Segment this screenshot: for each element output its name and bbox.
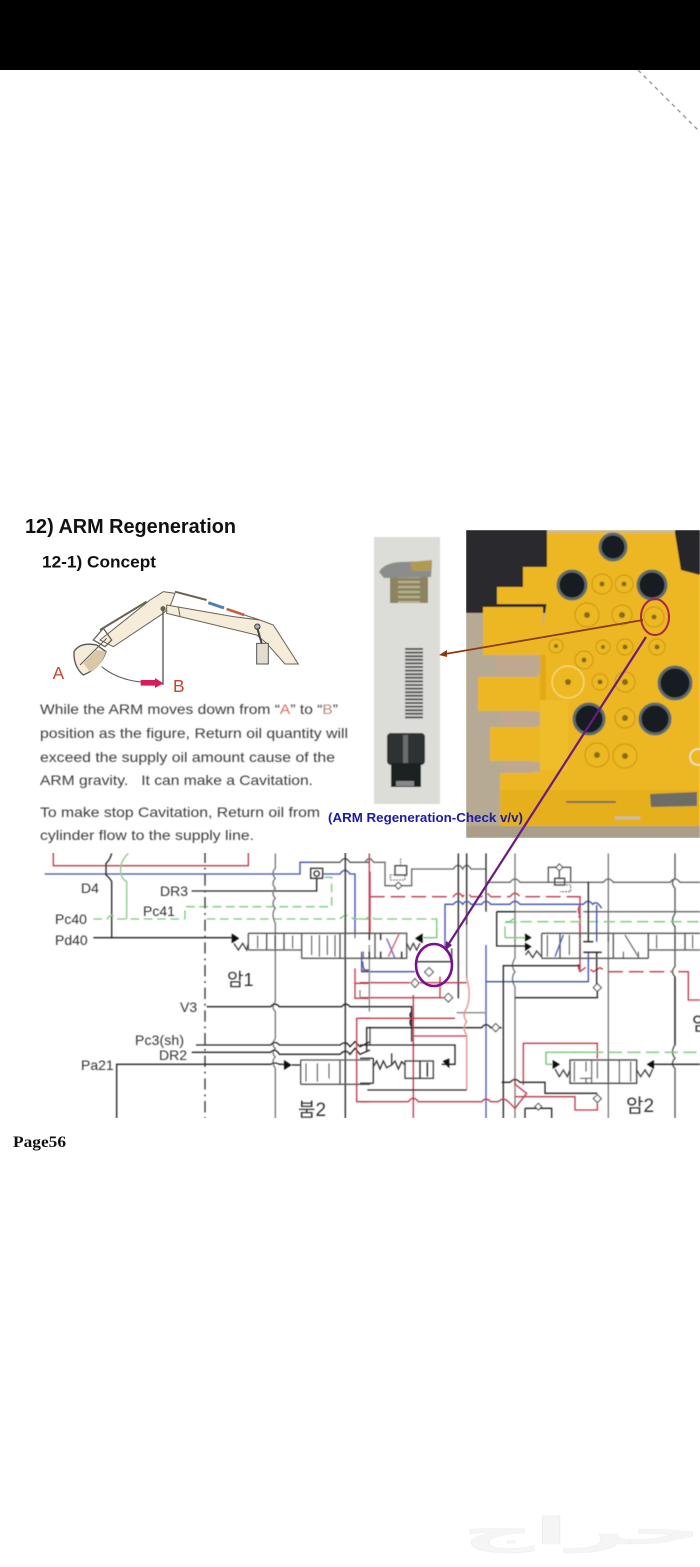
schematic right part — [360, 853, 700, 1118]
photo: control valve block — [466, 530, 700, 838]
label D4: D4 — [81, 880, 99, 896]
plug — [379, 560, 432, 603]
schematic labels: Pc40 — [55, 911, 87, 927]
schematic labels: Pd40 — [55, 932, 88, 948]
schematic labels: Pc41 — [143, 903, 175, 919]
schematic labels — [55, 880, 700, 1121]
label A: A — [53, 663, 65, 683]
label B: B — [173, 676, 185, 696]
subheading: Concept: 12-1) Concept — [42, 554, 157, 572]
purple arrow to check valve — [445, 637, 646, 951]
schematic labels: DR3 — [160, 883, 188, 899]
schematic left part — [45, 852, 370, 1118]
arm 1 valve right — [360, 933, 420, 958]
line 1: While the ARM moves down from “ A” to “B” — [40, 701, 338, 717]
spool — [387, 733, 425, 787]
top relief valve block — [548, 867, 571, 892]
schematic labels: V3 — [180, 999, 197, 1015]
description text block: exceed the supply oil amount cause of the — [40, 749, 335, 765]
description text block — [40, 701, 348, 843]
schematic labels: Pc3(sh) — [135, 1032, 184, 1048]
hydraulic schematic — [45, 852, 700, 1118]
photo: check valve parts — [374, 537, 440, 804]
brown arrow to valve parts — [439, 620, 643, 657]
heading: ARM Regeneration: 12) ARM Regeneration — [25, 516, 236, 538]
spring — [405, 648, 423, 720]
schematic labels: 암1 — [227, 970, 254, 990]
excavator arm figure — [53, 592, 298, 696]
schematic labels: DR2 — [159, 1047, 187, 1063]
purple highlight ellipse — [416, 944, 452, 986]
arm 1 valve left — [248, 933, 370, 958]
description text block: cylinder flow to the supply line. — [40, 827, 254, 843]
dashed corner fold line — [638, 70, 700, 132]
arm 2 valve — [555, 1060, 653, 1083]
description text block: ARM gravity. It can make a Cavitation. — [40, 772, 313, 788]
valve diamonds — [395, 864, 601, 1110]
red highlight ellipse on block — [641, 599, 669, 635]
arm 1 second valve — [526, 933, 700, 958]
schematic labels: 암2 — [626, 1095, 654, 1117]
schematic labels: 붐2 — [298, 1099, 326, 1121]
description text block: To make stop Cavitation, Return oil from — [40, 804, 320, 820]
small plugs — [549, 574, 700, 768]
page number: Page56 — [13, 1134, 66, 1151]
description text block: position as the figure, Return oil quantity will — [40, 725, 348, 741]
schematic labels: Pa21 — [81, 1057, 114, 1073]
caption: ARM Regeneration check valve: (ARM Regeneration-Check v/v) — [328, 810, 523, 825]
watermark logo: حراج — [463, 1509, 700, 1553]
boom 2 valve left — [301, 1060, 370, 1084]
valve ports — [558, 534, 691, 734]
black top bar — [0, 0, 700, 70]
